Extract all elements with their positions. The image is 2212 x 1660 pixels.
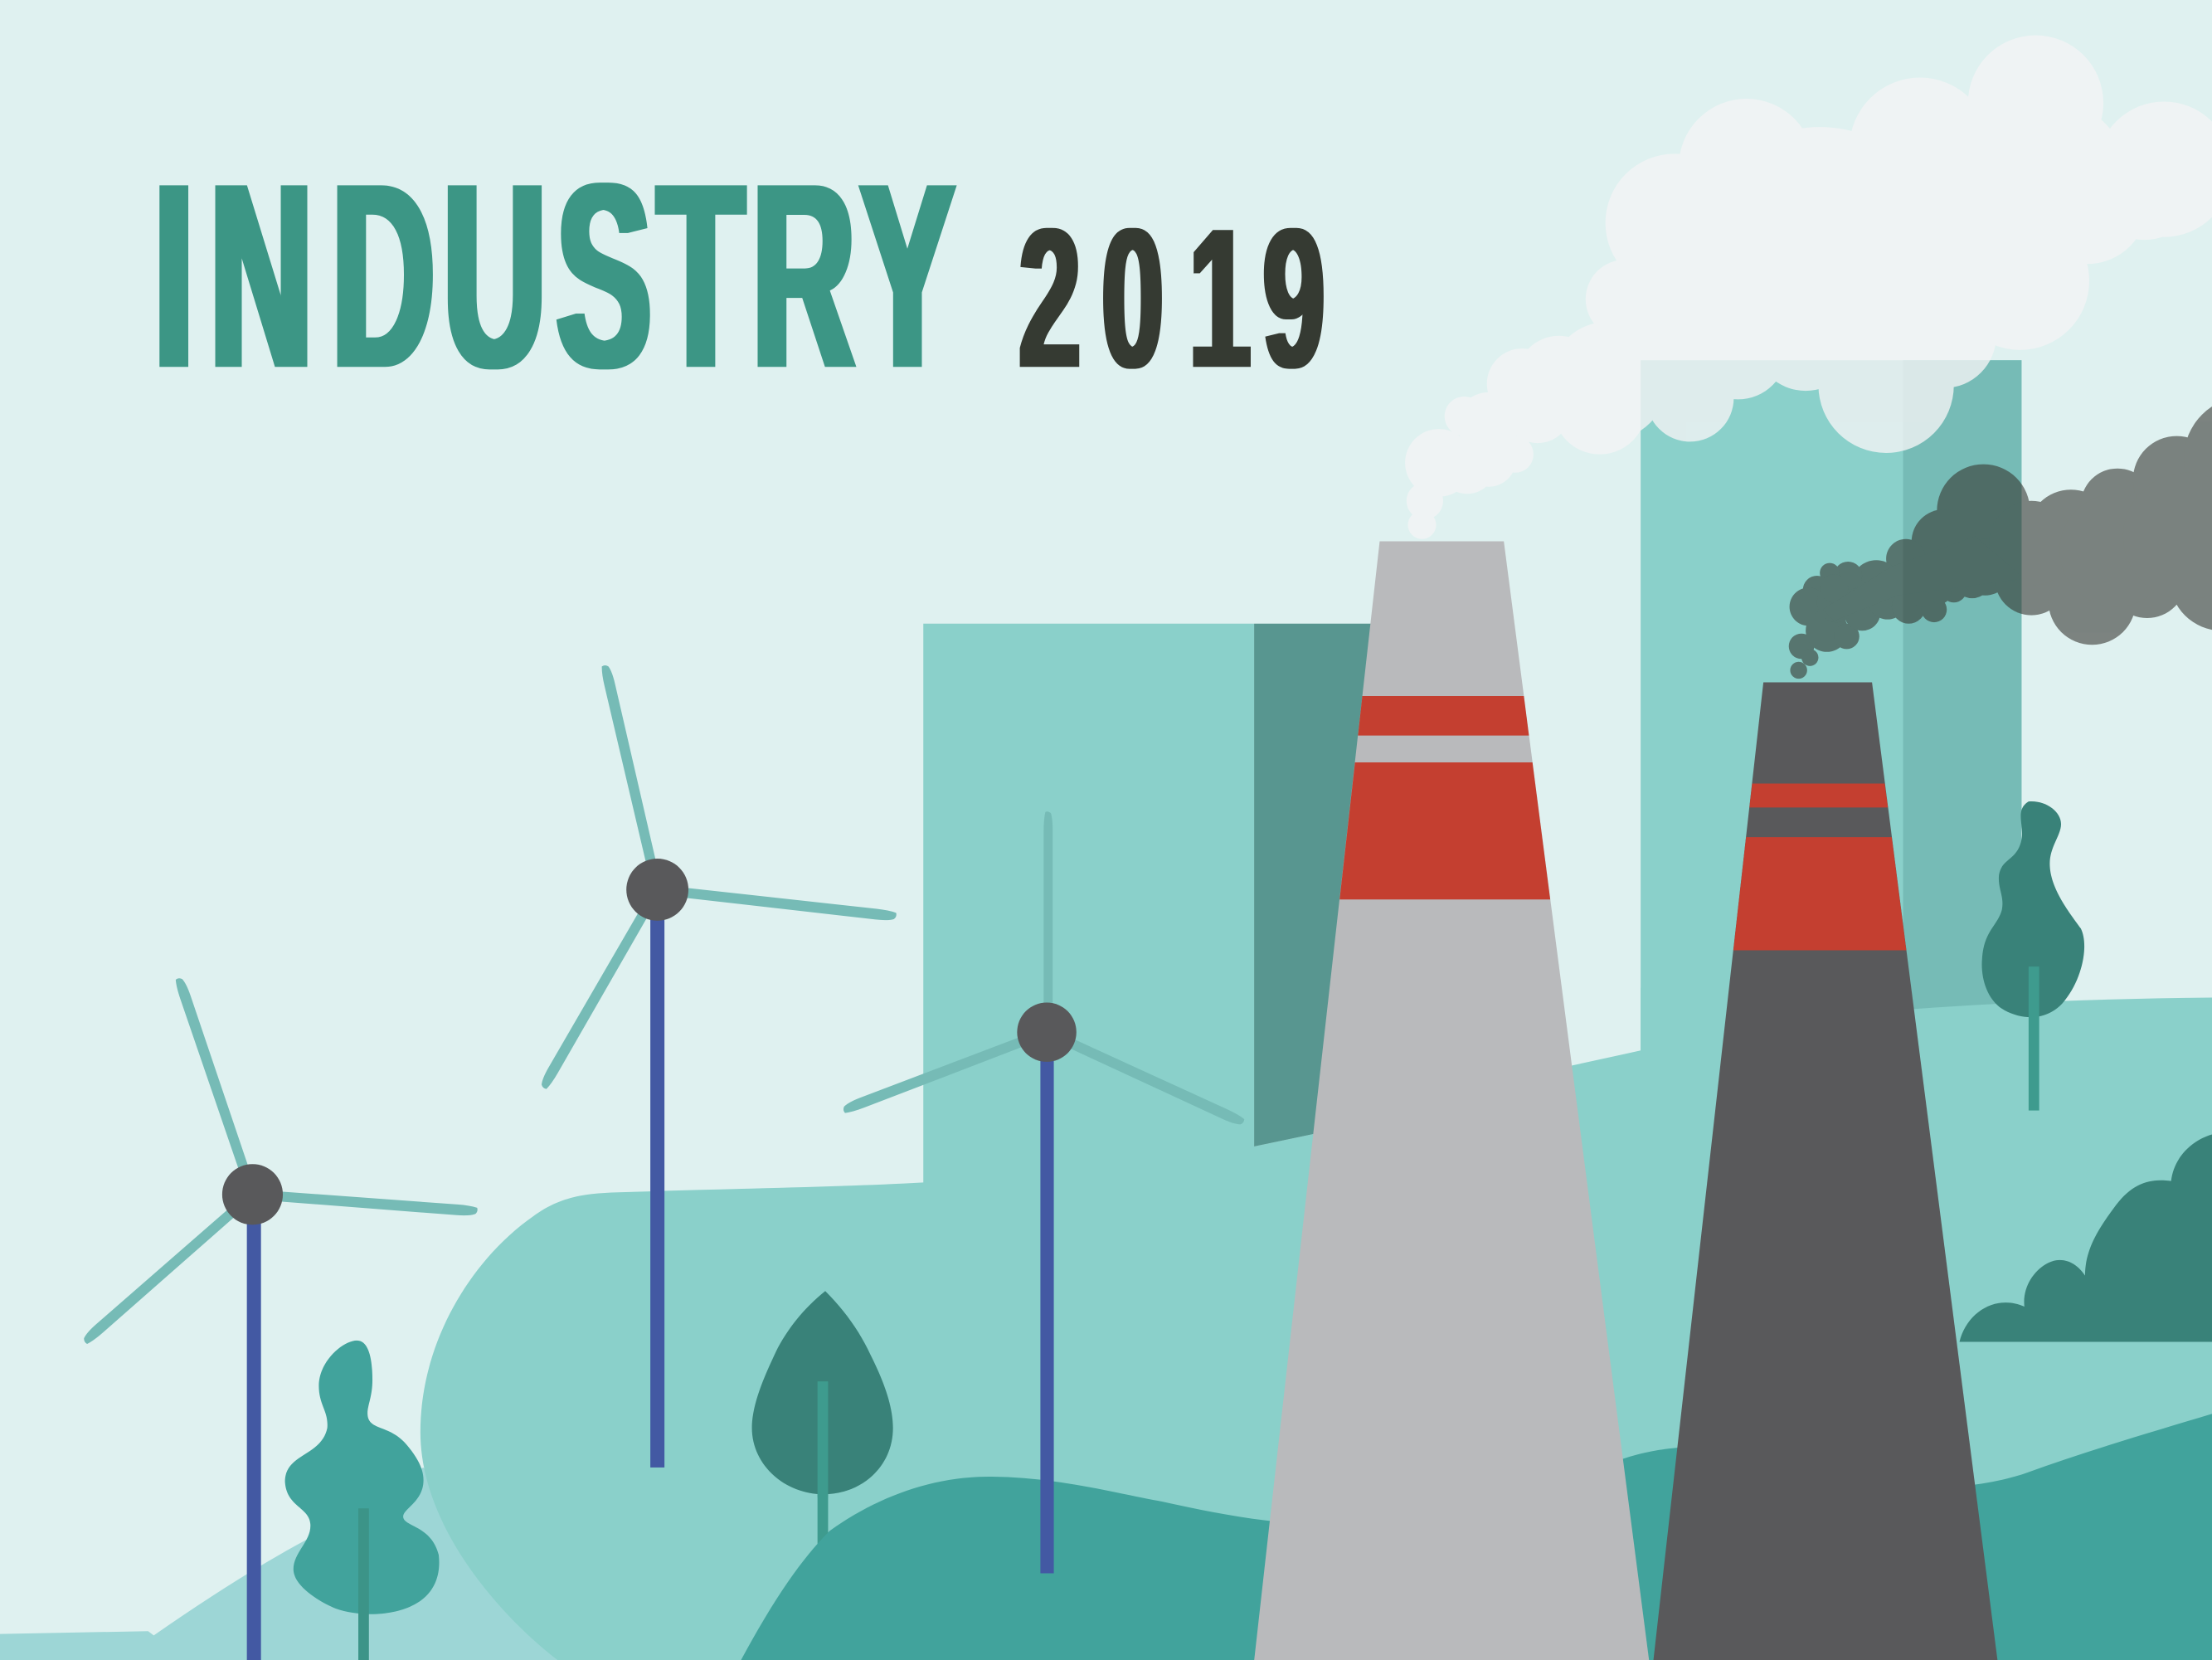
large teal hill with factory block (421, 624, 2212, 1660)
year: 2019: 2019 (1018, 187, 1325, 410)
tree: right crown (1982, 801, 2084, 1017)
tree: leaf trunk (818, 1381, 828, 1558)
light chimney (1254, 541, 1649, 1660)
title: INDUSTRY: INDUSTRY (154, 129, 955, 424)
wind turbine 2 (538, 664, 897, 1468)
factory back tower (1641, 360, 2021, 1151)
light foreground hill, left (0, 1468, 592, 1660)
tree: left crown (285, 1341, 439, 1614)
dark smoke cloud (1789, 397, 2212, 679)
tree: leaf crown (752, 1291, 893, 1494)
dark chimney (1653, 683, 1997, 1660)
mid green hill (741, 1414, 2212, 1660)
bush, right (1960, 1135, 2212, 1342)
wind turbine 1 (81, 976, 478, 1660)
white smoke cloud (1405, 36, 2212, 539)
teal trunk overlay on leaf tree (818, 1381, 828, 1497)
tree: left trunk (358, 1508, 369, 1660)
tree: right trunk (2029, 966, 2039, 1111)
factory dark side wall (1254, 624, 1389, 1146)
wind turbine 3 (842, 811, 1246, 1573)
